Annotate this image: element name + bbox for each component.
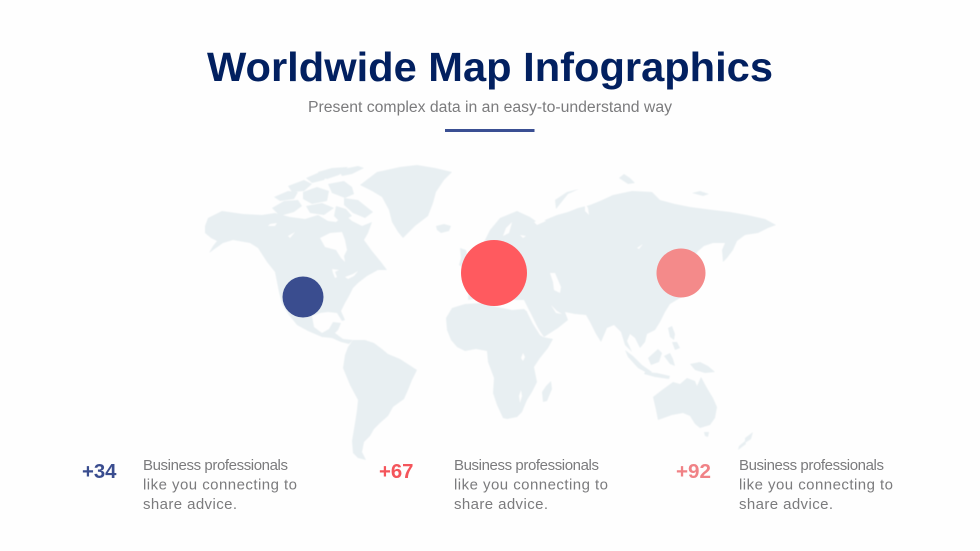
- description 1: like you connecting to: [143, 476, 297, 494]
- stat value: +92: +92: [676, 460, 711, 483]
- description 2: share advice.: [454, 496, 548, 513]
- stat block 3: [676, 457, 893, 513]
- description 2: Business professionals: [454, 457, 599, 474]
- description 2: like you connecting to: [454, 476, 608, 494]
- islands: southeast asia, new zealand and arctic russia: [555, 174, 753, 450]
- australia: [653, 377, 717, 428]
- description 3: [739, 457, 893, 513]
- south america: [343, 340, 417, 460]
- description 3: share advice.: [739, 496, 833, 513]
- circle marker: europe: [461, 240, 527, 306]
- description 1: Business professionals: [143, 457, 288, 474]
- description 1: [143, 457, 297, 513]
- description 1: share advice.: [143, 496, 237, 513]
- world map: [205, 165, 776, 460]
- iceland: [436, 224, 451, 233]
- description 2: [454, 457, 608, 513]
- stat value: +34: +34: [82, 460, 117, 483]
- madagascar: [542, 381, 552, 402]
- title: Worldwide Map Infographics: [207, 44, 773, 90]
- africa: [446, 303, 553, 419]
- inland seas: [268, 203, 643, 403]
- title underline: [445, 129, 534, 132]
- circle marker: east asia: [656, 248, 706, 298]
- circle marker: north america: [282, 276, 324, 318]
- subtitle: Present complex data in an easy-to-understand way: [308, 99, 672, 116]
- greenland: [360, 165, 452, 238]
- stat block 1: [82, 457, 297, 513]
- eurasia: [468, 191, 776, 352]
- description 3: Business professionals: [739, 457, 884, 474]
- description 3: like you connecting to: [739, 476, 893, 494]
- arctic islands: [272, 166, 373, 222]
- north america: [205, 211, 387, 344]
- stat block 2: [379, 457, 608, 513]
- stat value: +67: +67: [379, 460, 414, 483]
- uk and ireland: [459, 248, 469, 268]
